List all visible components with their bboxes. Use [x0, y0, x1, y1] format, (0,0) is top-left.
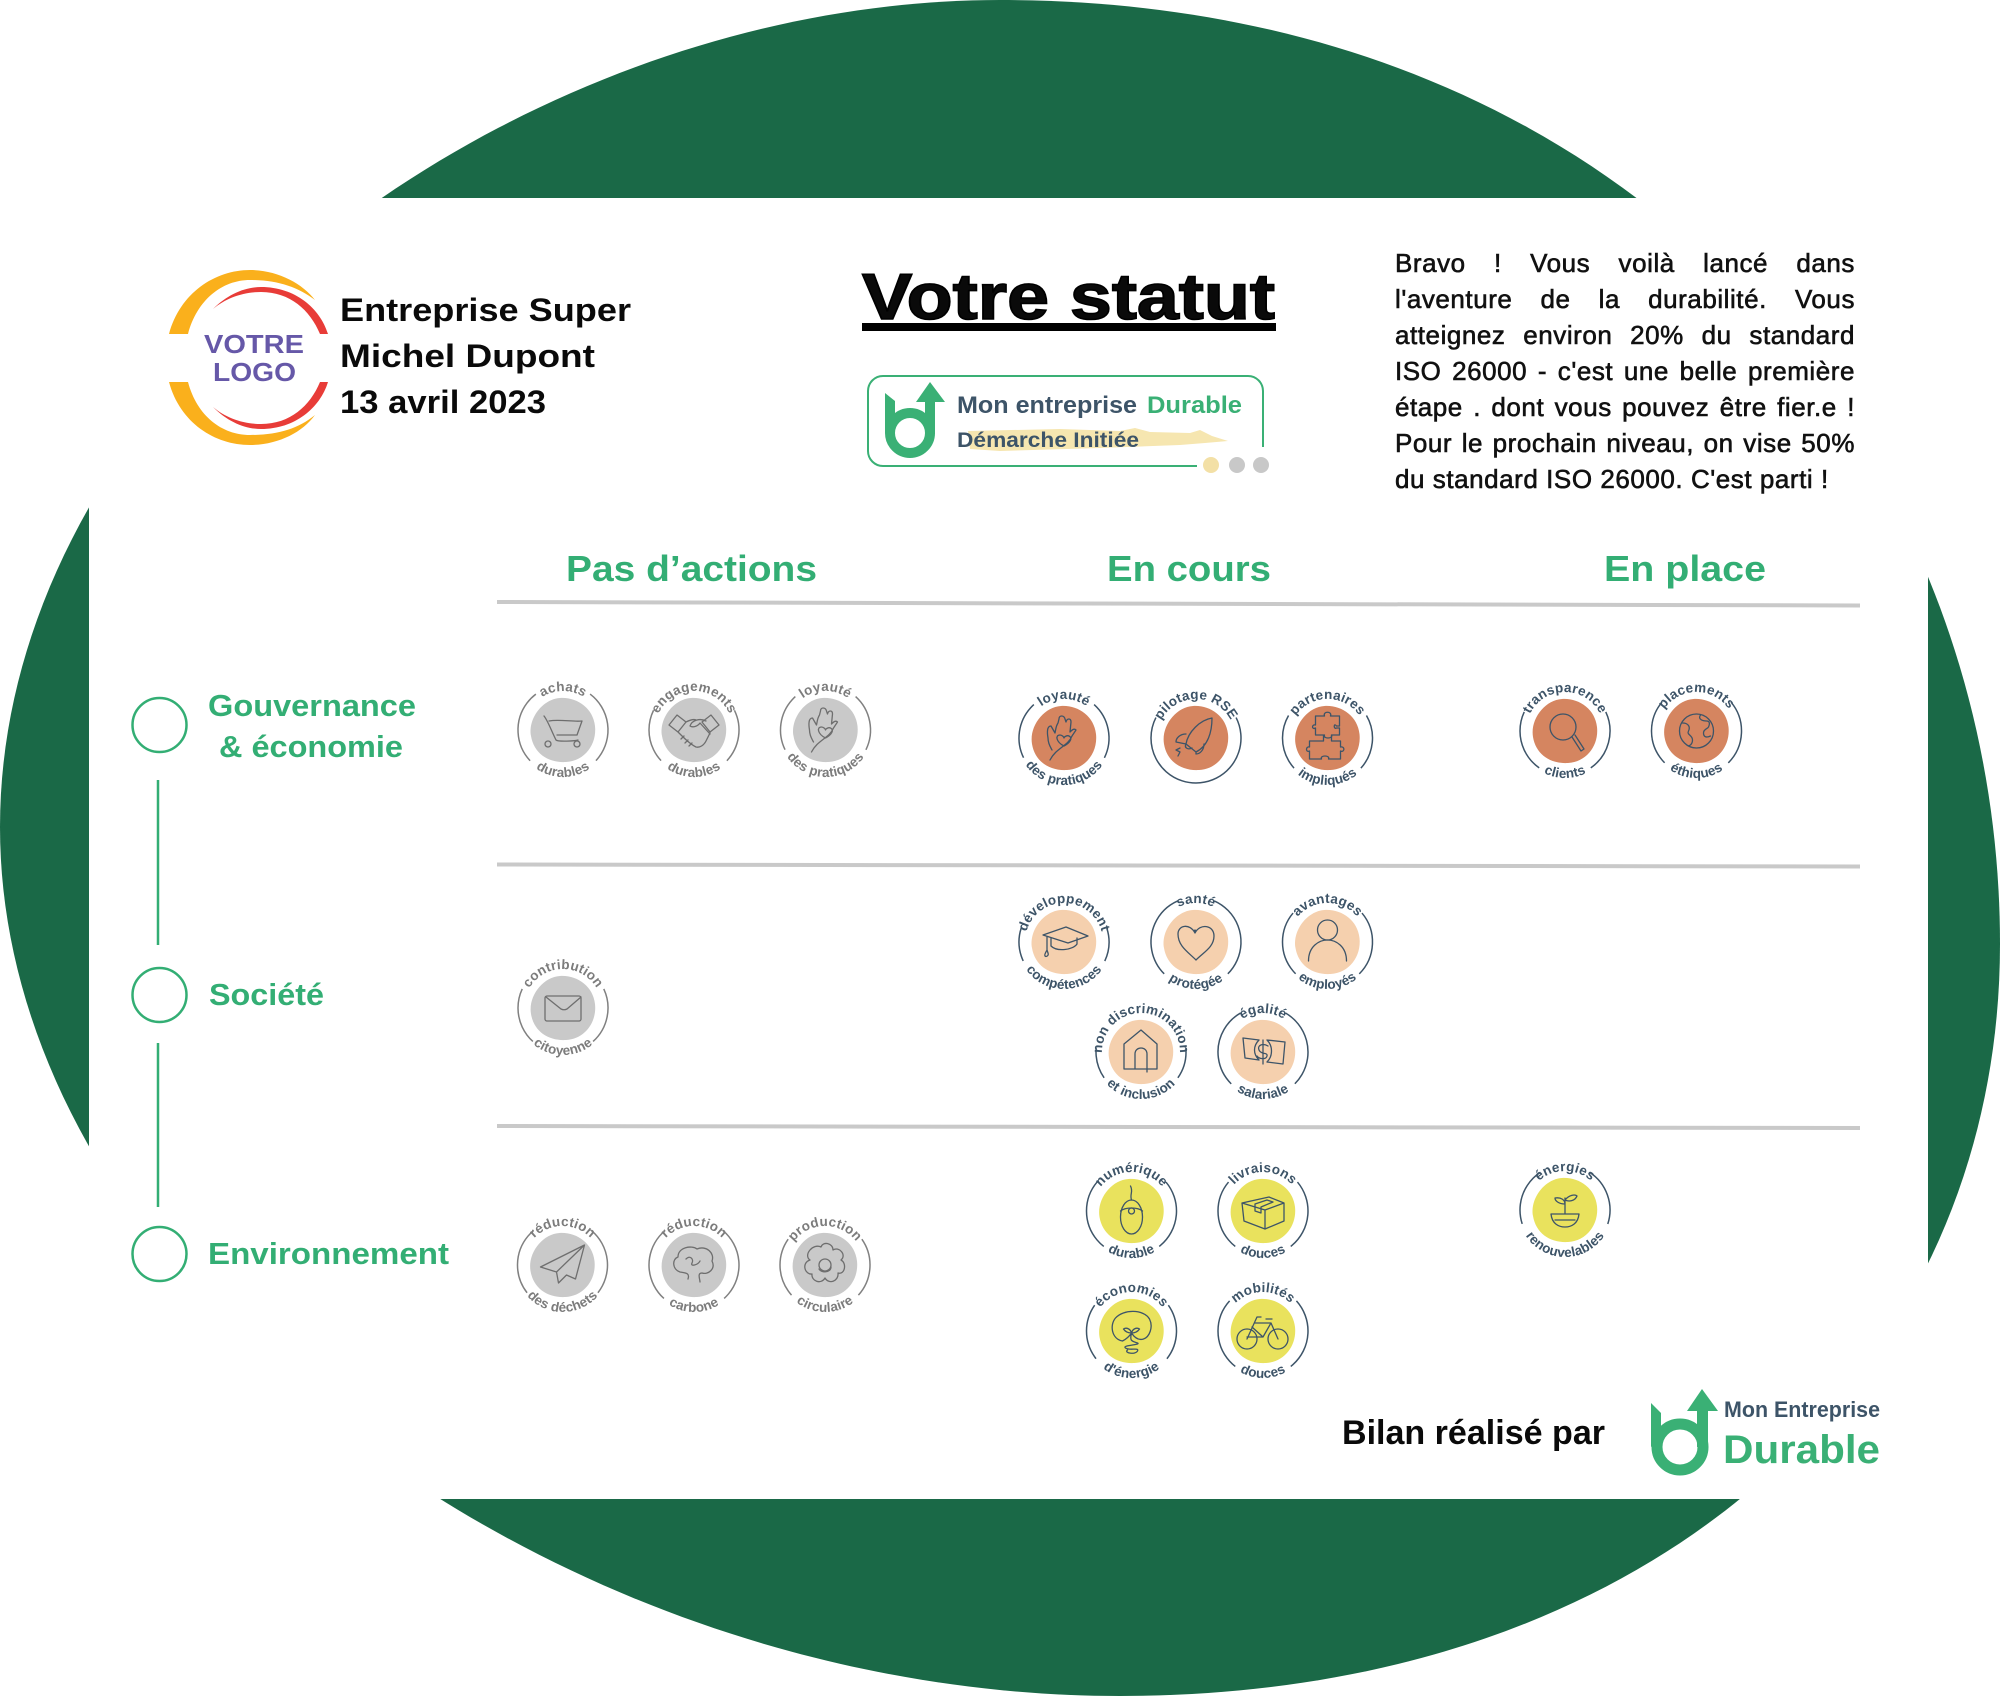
badge: avantages employés: avantages — [1294, 894, 1361, 916]
badge: placements éthiques: placements — [1659, 684, 1733, 710]
badge: non discrimination et inclusion: non discrimination — [1094, 1003, 1188, 1052]
badge: non discrimination et inclusion — [1094, 1003, 1188, 1099]
icon: paper plane — [540, 1245, 584, 1283]
description paragraph: l'aventure de la durabilité. Vous — [1395, 284, 1855, 314]
badge: santé protégée — [1150, 895, 1242, 991]
badge: achats durables: achats — [540, 682, 586, 696]
badge: énergies renouvelables: renouvelables — [1526, 1232, 1604, 1257]
badge: loyauté des pratiques: des pratiques — [1026, 762, 1102, 786]
status badge: Durable — [1147, 392, 1242, 419]
status badge — [868, 376, 1269, 473]
column headers: En cours — [1107, 548, 1271, 589]
badge: transparence clients: transparence — [1523, 684, 1605, 713]
badge: loyauté des pratiques (grey): loyauté — [798, 684, 852, 698]
category label: gouvernance — [208, 688, 416, 764]
description paragraph — [1395, 248, 1855, 494]
icon: globe — [1680, 714, 1714, 748]
column headers: En place — [1604, 548, 1766, 589]
description paragraph: Bravo ! Vous voilà lancé dans — [1395, 248, 1855, 278]
logo: mon entreprise durable — [1651, 1389, 1880, 1472]
category label: gouvernance: Gouvernance — [208, 688, 416, 723]
icon: flower — [805, 1243, 845, 1282]
badge: économies d'énergie: d'énergie — [1104, 1363, 1159, 1379]
badge: pilotage RSE: pilotage RSE — [1156, 692, 1238, 721]
badge: partenaires impliqués — [1282, 692, 1374, 788]
badge: partenaires impliqués: partenaires — [1290, 692, 1364, 717]
badge: pilotage RSE — [1150, 692, 1242, 784]
badge: réduction des déchets — [516, 1218, 608, 1312]
badge: engagements durables: engagements — [654, 684, 735, 712]
description paragraph: Pour le prochain niveau, on vise 50% — [1395, 428, 1855, 458]
badge: économies d'énergie — [1086, 1284, 1178, 1379]
badge: réduction carbone: carbone — [667, 1294, 721, 1315]
icon: box — [1242, 1197, 1284, 1229]
company details: 13 avril 2023 — [340, 384, 546, 420]
badge: loyauté des pratiques: loyauté — [1036, 692, 1090, 706]
badge: mobilités douces: douces — [1241, 1365, 1285, 1378]
icon: cart — [544, 716, 582, 747]
badge: livraisons douces — [1217, 1162, 1309, 1258]
badge: engagements durables: durables — [668, 762, 720, 778]
icon: magnifier — [1550, 714, 1584, 751]
description paragraph: étape . dont vous pouvez être fier.e ! — [1395, 392, 1855, 422]
icon: bulb — [1112, 1311, 1151, 1353]
icon: hand — [1047, 716, 1076, 760]
badge: achats durables: durables — [537, 762, 589, 778]
white content panel — [89, 198, 1928, 1499]
category label: gouvernance: & économie — [219, 729, 403, 764]
badge: santé protégée: santé — [1177, 895, 1216, 906]
badge: livraisons douces: livraisons — [1228, 1162, 1296, 1184]
badge: numérique durable: numérique — [1096, 1162, 1166, 1186]
logo: mon entreprise durable: Mon Entreprise — [1724, 1397, 1880, 1422]
badge: énergies renouvelables: énergies — [1536, 1162, 1594, 1180]
icon: house — [1124, 1030, 1157, 1072]
badge: livraisons douces: douces — [1241, 1245, 1285, 1258]
credit line: Bilan réalisé par — [1342, 1414, 1605, 1452]
status badge: Mon entreprise — [957, 392, 1137, 419]
icon: puzzle — [1306, 712, 1344, 759]
badge: avantages employés — [1282, 894, 1374, 991]
icon: brand mark — [885, 382, 945, 453]
icon: mortarboard — [1043, 927, 1088, 956]
badge: égalité salariale — [1217, 1003, 1309, 1100]
badge: contribution citoyenne — [517, 959, 609, 1058]
badge: mobilités douces — [1217, 1282, 1309, 1378]
column headers — [566, 548, 1766, 589]
badge: achats durables — [517, 682, 609, 778]
badge: numérique durable: durable — [1109, 1245, 1154, 1258]
description paragraph: ISO 26000 - c'est une belle première — [1395, 356, 1855, 386]
timeline of categories — [132, 698, 186, 1281]
badge: santé protégée: protégée — [1168, 974, 1222, 991]
badge: énergies renouvelables — [1519, 1162, 1611, 1257]
brush highlight — [968, 428, 1228, 451]
badge: avantages employés: employés — [1300, 974, 1356, 991]
company details: Michel Dupont — [340, 338, 595, 374]
column headers: Pas d’actions — [566, 548, 817, 589]
badge: non discrimination et inclusion: et inclusion — [1108, 1080, 1175, 1099]
badge: placements éthiques: éthiques — [1671, 763, 1722, 781]
badge: réduction des déchets: réduction — [530, 1218, 594, 1238]
badge: économies d'énergie: économies — [1096, 1284, 1167, 1306]
description paragraph: du standard ISO 26000. C'est parti ! — [1395, 464, 1829, 494]
category label: société: Société — [209, 977, 324, 1012]
badge: transparence clients: clients — [1545, 766, 1585, 778]
category label: environnement: Environnement — [208, 1236, 449, 1271]
logo: votre logo — [169, 270, 328, 445]
badge: partenaires impliqués: impliqués — [1298, 767, 1356, 788]
icon: rocket — [1176, 718, 1212, 756]
icon: money — [1243, 1038, 1285, 1064]
badge: développement compétences: compétences — [1027, 966, 1101, 990]
badge: développement compétences: développement — [1019, 896, 1110, 932]
badge: réduction carbone — [648, 1218, 740, 1312]
badge: engagements durables — [648, 684, 740, 778]
badge: placements éthiques — [1650, 684, 1742, 781]
badge: réduction des déchets: des déchets — [528, 1292, 597, 1312]
logo: mon entreprise durable: Durable — [1723, 1428, 1880, 1472]
company details: Entreprise Super — [340, 292, 631, 328]
badge: contribution citoyenne: citoyenne — [534, 1040, 592, 1058]
icon: person — [1308, 920, 1346, 961]
badge: égalité salariale: égalité — [1240, 1003, 1287, 1018]
icon: envelope — [545, 996, 581, 1021]
company details — [340, 292, 631, 420]
title: Votre statut — [862, 260, 1275, 333]
badge: contribution citoyenne: contribution — [524, 959, 602, 988]
badge: développement compétences — [1018, 896, 1110, 990]
icon: bicycle — [1237, 1317, 1288, 1349]
logo: votre logo: VOTRE — [204, 329, 304, 359]
badge: loyauté des pratiques (grey) — [780, 684, 872, 778]
description paragraph: atteignez environ 20% du standard — [1395, 320, 1855, 350]
icon: handshake — [669, 715, 719, 747]
badge: loyauté des pratiques (grey): des pratiques — [788, 754, 863, 778]
icon: mouse — [1120, 1186, 1142, 1234]
badge: production circulaire: production — [785, 1214, 865, 1244]
badge: loyauté des pratiques — [1018, 692, 1110, 786]
logo: votre logo: LOGO — [213, 357, 296, 387]
icon: heart — [1178, 926, 1214, 960]
badge: réduction carbone: réduction — [662, 1218, 726, 1238]
icon: plant pot — [1551, 1195, 1579, 1227]
badge: mobilités douces: mobilités — [1232, 1282, 1294, 1302]
icon: brain cloud — [674, 1247, 713, 1282]
badge: production circulaire — [779, 1217, 871, 1312]
badge: production circulaire: circulaire — [794, 1292, 856, 1315]
badge: transparence clients — [1519, 684, 1611, 778]
badge: numérique durable — [1086, 1162, 1178, 1258]
status badge: Démarche Initiée — [957, 429, 1139, 452]
icon: hand — [809, 708, 838, 752]
badge: égalité salariale: salariale — [1238, 1086, 1288, 1100]
